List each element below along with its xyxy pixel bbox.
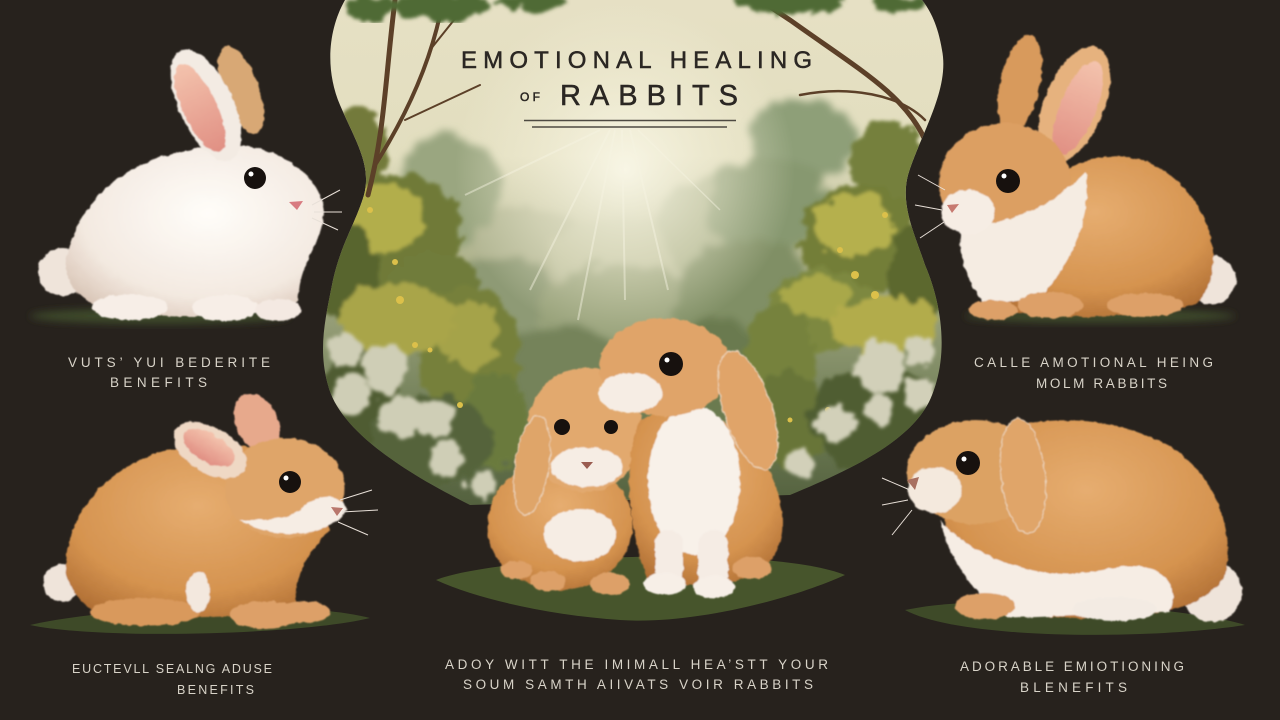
tree branches <box>368 0 925 195</box>
ground <box>30 607 370 634</box>
ground <box>965 309 1235 323</box>
nose <box>947 204 959 213</box>
caption: top right <box>974 355 1213 391</box>
left rabbit eyes <box>554 419 618 435</box>
caption: bottom left: BENEFITS <box>177 683 254 697</box>
whiskers <box>915 175 945 238</box>
caption: bottom centre: ADOY WITT THE IMIMALL HEA’STT YOUR <box>445 657 828 672</box>
caption: bottom right: ADORABLE EMIOTIONING <box>960 659 1184 674</box>
tan rabbit fur <box>907 416 1242 622</box>
left rabbit fur <box>487 368 643 595</box>
right rabbit fur <box>598 318 790 598</box>
distant misty trees <box>398 94 862 412</box>
white flowers right <box>786 335 938 476</box>
rabbits: hugging centre pair <box>436 318 845 621</box>
panel: central forest scene <box>310 0 960 520</box>
caption: bottom right <box>960 659 1184 695</box>
rabbit: tan top right <box>915 31 1236 323</box>
rabbit: tan bottom left <box>30 386 378 634</box>
caption: top right: CALLE AMOTIONAL HEING <box>974 355 1213 370</box>
caption: bottom centre <box>445 657 828 692</box>
ground <box>30 308 290 324</box>
whiskers <box>312 190 342 230</box>
caption: top left: BENEFITS <box>110 375 207 390</box>
caption: top right: MOLM RABBITS <box>1036 376 1167 391</box>
caption: bottom centre: SOUM SAMTH AIIVATS VOIR RABBITS <box>463 677 813 692</box>
title line 1: EMOTIONAL HEALING <box>461 47 812 74</box>
left foliage <box>320 105 527 485</box>
eye <box>244 167 266 189</box>
tan rabbit fur <box>939 31 1236 320</box>
eye <box>996 169 1020 193</box>
left rabbit nose <box>581 462 593 469</box>
right rabbit eye <box>659 352 683 376</box>
whiskers <box>338 490 378 535</box>
central light glow <box>468 57 784 326</box>
title underline <box>524 120 736 127</box>
whiskers <box>882 478 912 535</box>
nose <box>289 201 303 210</box>
white flowers left <box>328 333 494 499</box>
tan rabbit fur <box>43 386 346 629</box>
ground <box>905 602 1245 635</box>
caption: top left <box>68 355 270 390</box>
caption: bottom left <box>72 662 272 697</box>
rabbit: tan bottom right <box>882 416 1245 635</box>
leaf canopy <box>345 0 928 20</box>
title line 2: RABBITS <box>560 80 738 112</box>
right foliage <box>744 120 950 475</box>
white rabbit fur <box>38 39 324 321</box>
caption: top left: VUTS’ YUI BEDERITE <box>68 355 270 370</box>
rabbit: white top left <box>30 39 342 324</box>
title small word: OF <box>520 90 540 104</box>
caption: bottom right: BLENEFITS <box>1020 680 1127 695</box>
eye <box>279 471 301 493</box>
nose <box>907 477 919 490</box>
caption: bottom left: EUCTEVLL SEALNG ADUSE <box>72 662 272 676</box>
ground <box>436 556 845 621</box>
title <box>461 47 812 127</box>
yellow blossoms <box>367 207 888 422</box>
nose <box>331 507 343 516</box>
sun rays <box>464 153 720 320</box>
eye <box>956 451 980 475</box>
